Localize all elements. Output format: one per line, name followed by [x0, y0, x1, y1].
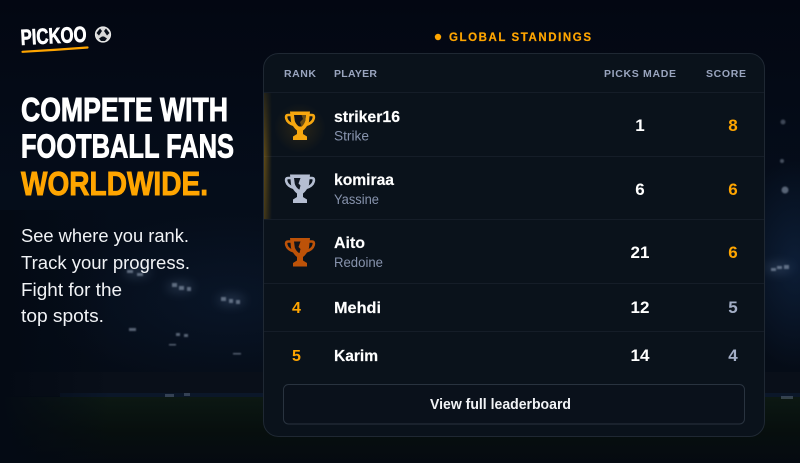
row 2: komiraa: 6: [635, 180, 645, 199]
row 3: Aito: 21: [631, 243, 649, 262]
section label: GLOBAL STANDINGS: [449, 32, 591, 44]
heading: [21, 91, 234, 202]
row 2: komiraa: [286, 172, 738, 207]
table header: [284, 68, 746, 80]
row 3: Aito: Aito: [334, 235, 365, 252]
heading: WORLDWIDE.: [21, 165, 208, 202]
table header: RANK: [284, 68, 316, 80]
icon: bronze trophy: [286, 238, 314, 266]
icon: football: [96, 27, 110, 42]
row 2: komiraa: Yassine: [334, 192, 379, 207]
panel: leaderboard: [264, 54, 764, 436]
row 2: komiraa: komiraa: [334, 172, 394, 189]
row 5: Karim: 14: [631, 346, 650, 365]
row 4: Mehdi: 5: [728, 298, 738, 317]
row 4: Mehdi: [292, 298, 738, 317]
icon: gold trophy: [286, 112, 314, 140]
intro text: See where you rank.: [21, 225, 189, 246]
row 3: Aito: Redoine: [334, 255, 383, 270]
row 1: striker16: striker16: [334, 109, 400, 126]
row 4: Mehdi: 4: [292, 300, 301, 317]
row 3: Aito: [286, 235, 738, 270]
table header: PLAYER: [334, 68, 377, 80]
row 4: Mehdi: Mehdi: [334, 300, 381, 317]
intro text: top spots.: [21, 305, 104, 326]
heading: FOOTBALL FANS: [21, 128, 234, 164]
logo: [20, 22, 111, 52]
icon: silver trophy: [286, 174, 314, 203]
row 1: striker16: [274, 103, 738, 153]
row 5: Karim: 4: [728, 346, 738, 365]
row 2: komiraa: 6: [728, 180, 738, 199]
button: view full leaderboard: [284, 384, 744, 424]
table header: PICKS MADE: [604, 68, 676, 80]
intro text: [21, 225, 190, 326]
row 5: Karim: [292, 346, 738, 365]
row 1: striker16: 1: [635, 116, 645, 135]
heading: COMPETE WITH: [21, 91, 228, 128]
wordmark: PICKOO: PICKOO: [20, 22, 87, 50]
button: view full leaderboard: View full leaderboard: [430, 397, 571, 413]
intro text: Track your progress.: [21, 252, 190, 273]
logo underline: [22, 48, 88, 52]
row 1: striker16: Strike: [334, 128, 369, 144]
row 3: Aito: 6: [728, 243, 738, 262]
intro text: Fight for the: [21, 279, 122, 300]
table header: SCORE: [706, 68, 746, 80]
row 4: Mehdi: 12: [631, 298, 649, 317]
row 5: Karim: 5: [292, 348, 301, 365]
row 5: Karim: Karim: [334, 348, 378, 365]
row 1: striker16: 8: [728, 116, 738, 135]
